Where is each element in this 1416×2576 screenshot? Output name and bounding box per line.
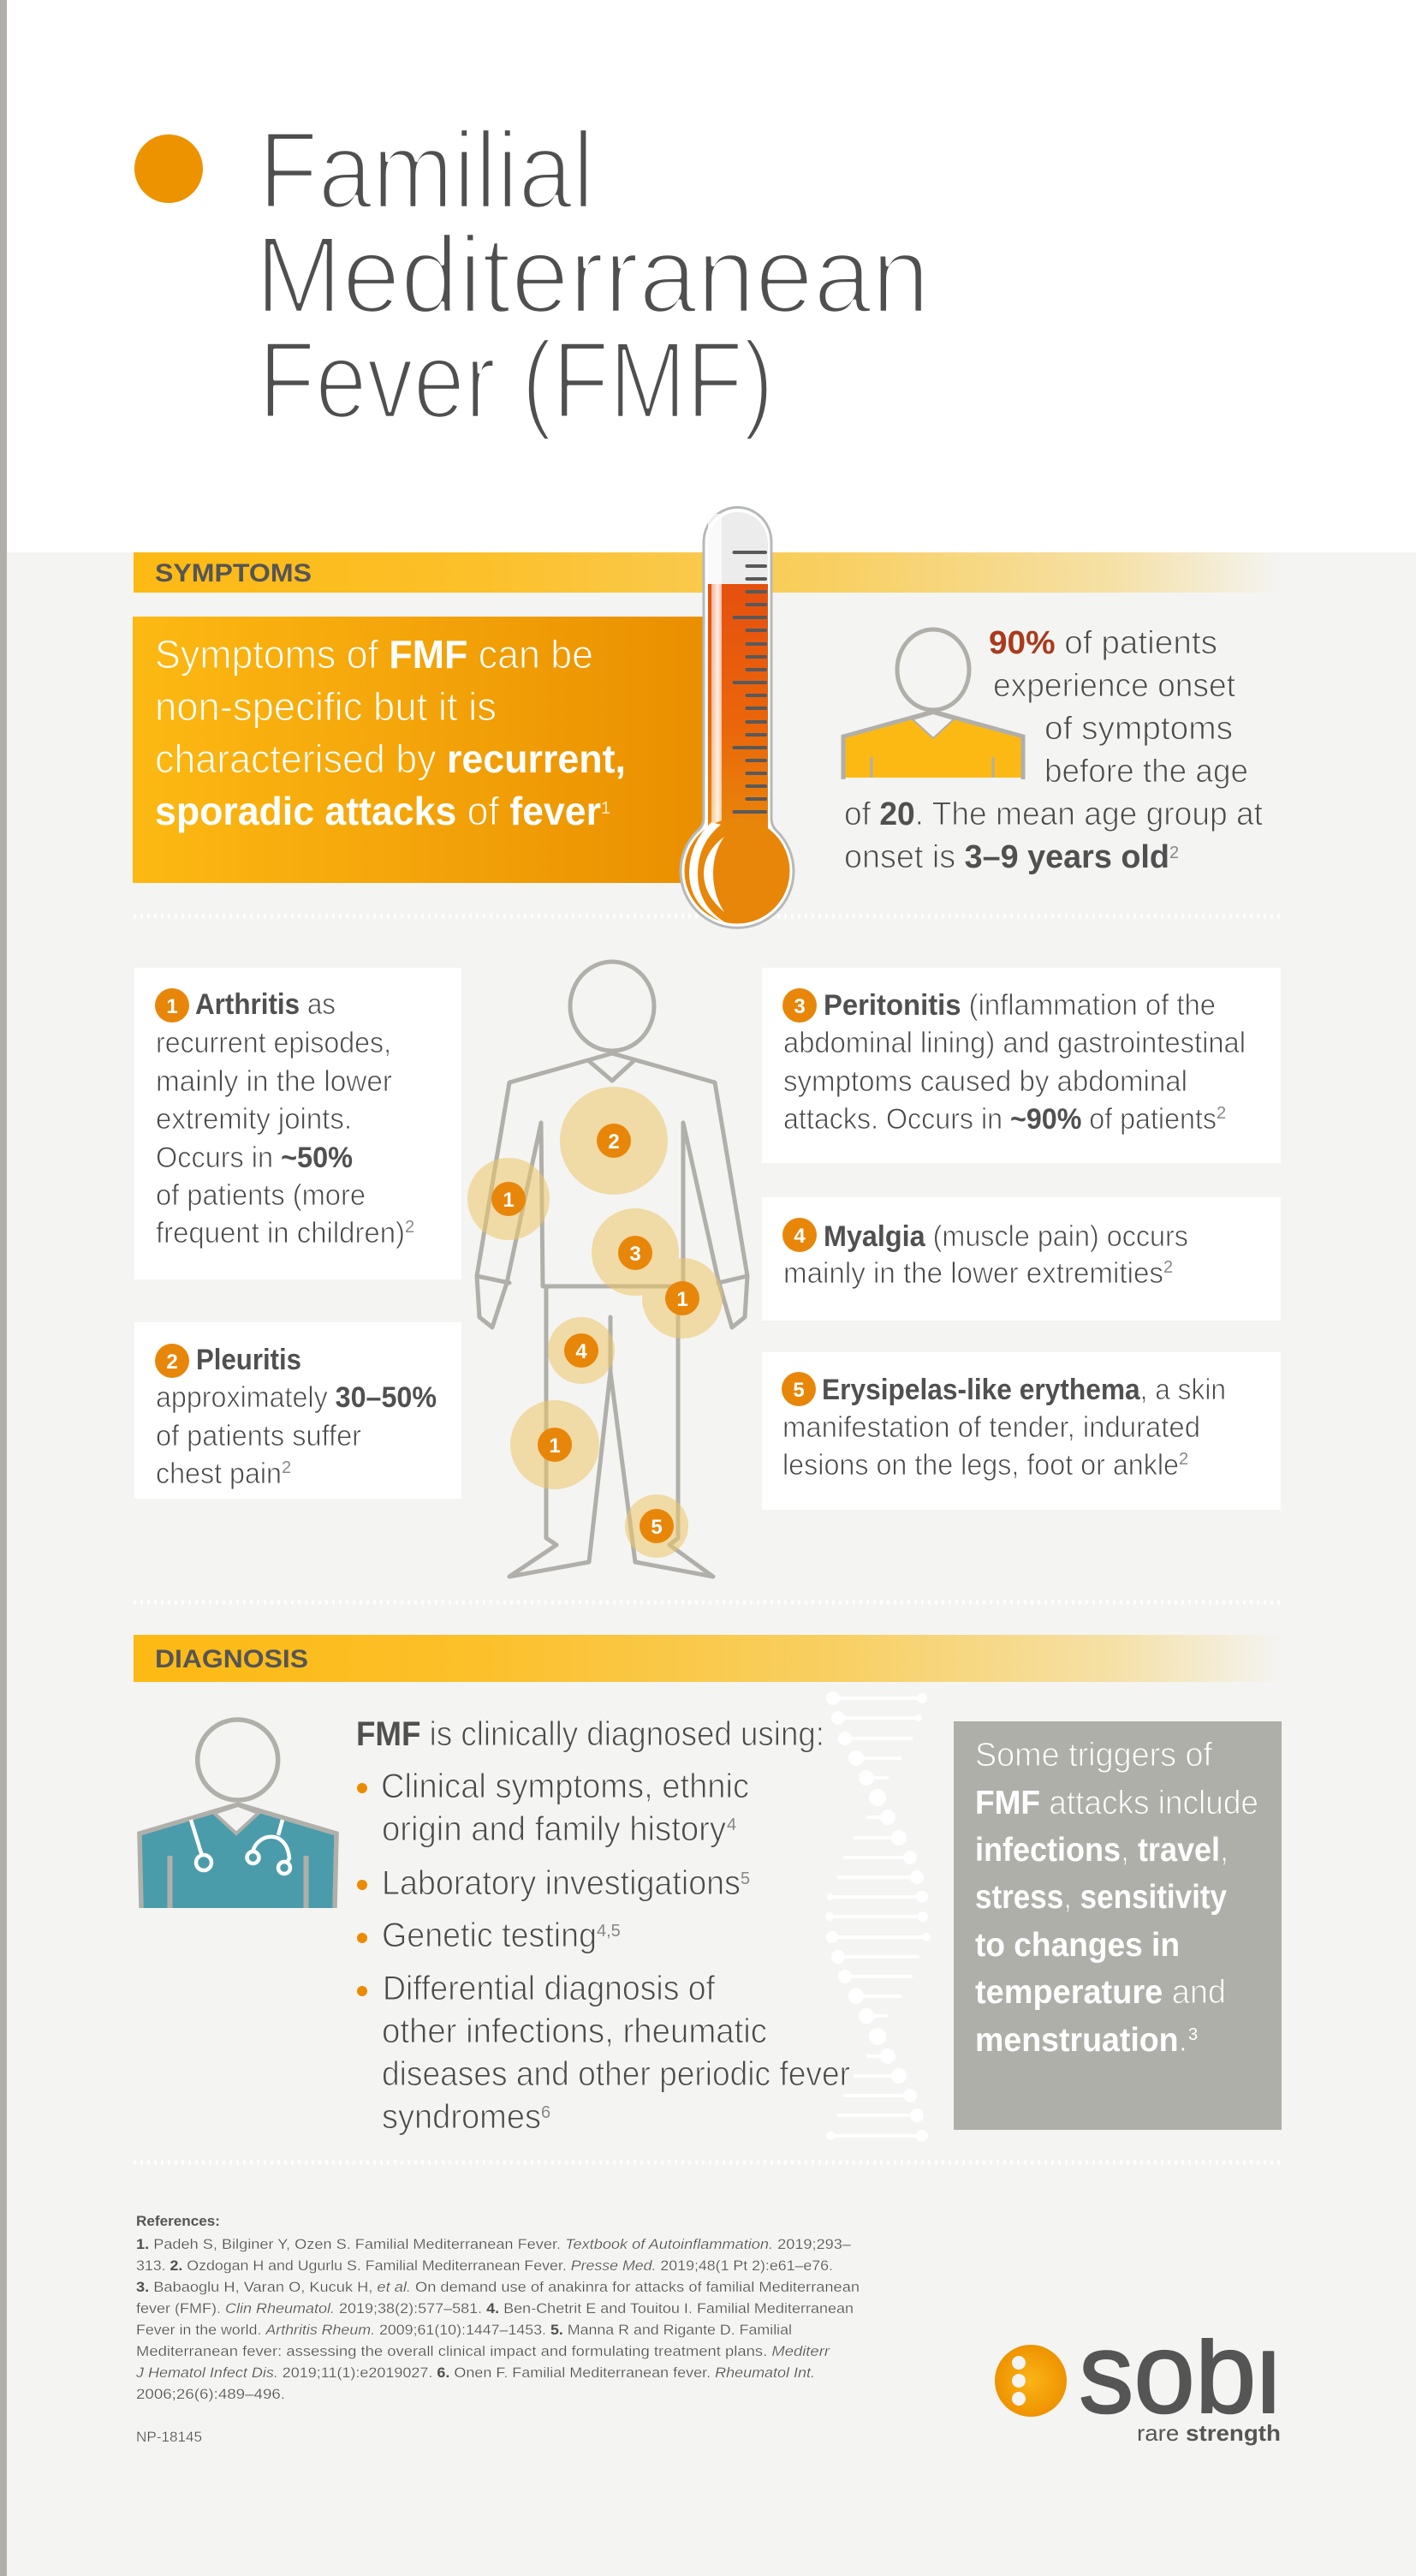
symptom site markers: 1 — [676, 1288, 688, 1311]
card: erythema: manifestation of tender, indurated — [782, 1411, 1200, 1444]
panel: symptoms summary: characterised by recurrent, — [155, 736, 626, 781]
panel: symptoms summary: Symptoms of FMF can be — [155, 632, 593, 677]
symptom site markers: 4 — [575, 1340, 587, 1363]
panel: symptoms summary: sporadic attacks of fever — [155, 789, 601, 833]
bullet: differential diagnosis — [357, 1970, 850, 2136]
card: erythema — [762, 1352, 1281, 1510]
card: arthritis: frequent in children) — [156, 1217, 405, 1249]
symptom site halos — [467, 1087, 723, 1558]
logo: sobi: rare strength — [1137, 2420, 1281, 2446]
bullet: clinical symptoms: Clinical symptoms, ethnic — [381, 1768, 749, 1805]
symptom site markers — [491, 1124, 699, 1543]
icon: patient bust — [843, 629, 1023, 779]
section heading: symptoms: SYMPTOMS — [155, 559, 312, 587]
logo: sobi — [995, 2310, 1288, 2446]
icon: number 2: 2 — [166, 1351, 178, 1374]
card: arthritis: Arthritis as — [195, 988, 336, 1021]
references: 1. Padeh S, Bilginer Y, Ozen S. Familial Mediterranean Fever. Textbook of Autoinflammation. 2019;293– — [136, 2236, 852, 2252]
panel: triggers: to changes in — [975, 1927, 1180, 1964]
logo: sobi: sobi — [1079, 2310, 1281, 2437]
bullet: differential diagnosis: diseases and other periodic fever — [382, 2055, 850, 2093]
references: fever (FMF). Clin Rheumatol. 2019;38(2):577–581. 4. Ben-Chetrit E and Touitou I. Familial Mediterranean — [136, 2300, 854, 2317]
symptom site markers: 3 — [629, 1243, 641, 1266]
card: peritonitis: attacks. Occurs in ~90% of patients — [783, 1103, 1217, 1136]
symptom site markers: 1 — [503, 1189, 515, 1212]
icon: thermometer — [681, 507, 794, 927]
bullet: clinical symptoms: origin and family history — [382, 1810, 726, 1848]
references: 3. Babaoglu H, Varan O, Kucuk H, et al. On demand use of anakinra for attacks of familial Mediterranean — [136, 2279, 860, 2295]
icon: number 4: 4 — [794, 1225, 806, 1248]
card: peritonitis: symptoms caused by abdominal — [783, 1065, 1187, 1098]
references — [135, 2213, 860, 2402]
text block: onset statistic: onset is 3–9 years old — [844, 839, 1169, 875]
references: References: — [136, 2213, 220, 2229]
text block: onset statistic: 2 — [1169, 844, 1179, 862]
bullet: clinical symptoms — [357, 1768, 749, 1848]
panel: symptoms summary: 1 — [601, 799, 610, 818]
section heading: symptoms — [134, 552, 1284, 593]
icon: number 5 — [782, 1372, 816, 1406]
text block: onset statistic: of 20. The mean age group at — [844, 796, 1263, 832]
references: J Hematol Infect Dis. 2019;11(1):e2019027. 6. Onen F. Familial Mediterranean fever. Rheumatol Int. — [135, 2364, 815, 2381]
bullet: differential diagnosis: other infections, rheumatic — [382, 2012, 767, 2050]
card: pleuritis: Pleuritis — [196, 1344, 301, 1376]
card: myalgia: 2 — [1163, 1258, 1173, 1277]
icon: title bullet — [134, 134, 203, 203]
card: myalgia: mainly in the lower extremities — [783, 1257, 1163, 1290]
panel: triggers: FMF attacks include — [975, 1785, 1258, 1822]
card: arthritis: recurrent episodes, — [156, 1027, 391, 1059]
icon: number 2 — [155, 1344, 189, 1378]
card: erythema: Erysipelas-like erythema, a skin — [822, 1374, 1226, 1406]
references: Fever in the world. Arthritis Rheum. 2009;61(10):1447–1453. 5. Manna R and Rigante D. Familial — [136, 2322, 792, 2338]
icon: number 1 — [155, 988, 189, 1023]
icon: number 3: 3 — [794, 995, 806, 1018]
text block: onset statistic: experience onset — [993, 668, 1235, 704]
card: arthritis: extremity joints. — [156, 1103, 352, 1136]
bullet: differential diagnosis: Differential diagnosis of — [383, 1970, 716, 2007]
text block: onset statistic: of symptoms — [1044, 711, 1233, 747]
title — [134, 110, 930, 442]
card: myalgia: Myalgia (muscle pain) occurs — [824, 1220, 1188, 1253]
symptom site markers: 5 — [651, 1516, 663, 1539]
card: pleuritis: approximately 30–50% — [156, 1381, 437, 1414]
card: peritonitis: abdominal lining) and gastrointestinal — [783, 1027, 1246, 1059]
divider — [134, 915, 1284, 918]
body diagram — [467, 962, 747, 1577]
card: arthritis: mainly in the lower — [156, 1065, 392, 1098]
section heading: diagnosis: DIAGNOSIS — [155, 1645, 308, 1673]
bullet: differential diagnosis: syndromes — [382, 2098, 541, 2136]
card: arthritis: 2 — [405, 1218, 414, 1237]
divider — [134, 1600, 1284, 1605]
bullet: genetic testing: Genetic testing — [382, 1917, 597, 1954]
icon: number 4 — [782, 1218, 817, 1252]
symptom site markers: 1 — [549, 1434, 561, 1458]
bullet: differential diagnosis: 6 — [541, 2103, 550, 2122]
card: peritonitis: 2 — [1217, 1104, 1226, 1123]
panel: triggers: stress, sensitivity — [975, 1879, 1227, 1916]
title text — [255, 110, 930, 442]
card: arthritis: of patients (more — [156, 1179, 366, 1212]
panel: symptoms summary — [133, 617, 706, 883]
title text: Mediterranean — [255, 214, 930, 337]
panel: triggers: temperature and — [975, 1974, 1226, 2011]
icon: DNA helix — [825, 1691, 931, 2142]
references: 313. 2. Ozdogan H and Ugurlu S. Familial Mediterranean Fever. Presse Med. 2019;48(1 Pt 2):e61–e76. — [136, 2257, 833, 2274]
bullet: laboratory: Laboratory investigations — [382, 1864, 741, 1902]
text block: onset statistic — [844, 625, 1263, 875]
job code: NP-18145 — [136, 2429, 202, 2445]
icon: number 3 — [782, 988, 817, 1023]
divider — [134, 2160, 1284, 2165]
card: pleuritis: of patients suffer — [156, 1420, 361, 1452]
icon: doctor — [140, 1720, 336, 1908]
card: arthritis — [134, 968, 461, 1279]
text block: onset statistic: before the age — [1044, 754, 1248, 790]
icon: logo disc — [995, 2345, 1067, 2417]
section heading: diagnosis — [134, 1635, 1284, 1682]
icon: number 5: 5 — [793, 1379, 805, 1402]
bullet: genetic testing: 4,5 — [597, 1922, 621, 1941]
title text: Fever (FMF) — [259, 319, 774, 442]
bullet: laboratory: 5 — [741, 1869, 750, 1888]
diagnosis lead-in: FMF is clinically diagnosed using: — [356, 1715, 824, 1753]
text block: onset statistic: 90% of patients — [989, 625, 1217, 661]
panel: triggers: Some triggers of — [975, 1737, 1212, 1774]
symptom site markers: 2 — [608, 1130, 620, 1154]
panel: triggers: 3 — [1188, 2025, 1198, 2044]
card: erythema: lesions on the legs, foot or ankle — [782, 1449, 1179, 1482]
card: peritonitis — [762, 968, 1281, 1163]
card: pleuritis: chest pain — [156, 1458, 282, 1490]
panel: triggers — [954, 1721, 1282, 2130]
card: arthritis: Occurs in ~50% — [156, 1142, 353, 1174]
card: myalgia — [762, 1197, 1281, 1321]
card: peritonitis: Peritonitis (inflammation of the — [824, 989, 1216, 1022]
panel: symptoms summary: non-specific but it is — [155, 684, 497, 729]
title text: Familial — [259, 110, 594, 232]
panel: triggers: infections, travel, — [975, 1832, 1229, 1869]
references: Mediterranean fever: assessing the overall clinical impact and formulating treatment plans. Mediterr — [136, 2343, 830, 2359]
card: pleuritis — [134, 1322, 461, 1499]
card: pleuritis: 2 — [282, 1458, 291, 1477]
card: erythema: 2 — [1179, 1450, 1188, 1469]
text block: clinical diagnosis — [356, 1715, 850, 2136]
icon: body outline — [477, 962, 747, 1577]
references: 2006;26(6):489–496. — [136, 2386, 285, 2402]
bullet: clinical symptoms: 4 — [727, 1816, 736, 1834]
icon: number 1: 1 — [166, 995, 178, 1018]
panel: triggers: menstruation. — [975, 2022, 1187, 2059]
